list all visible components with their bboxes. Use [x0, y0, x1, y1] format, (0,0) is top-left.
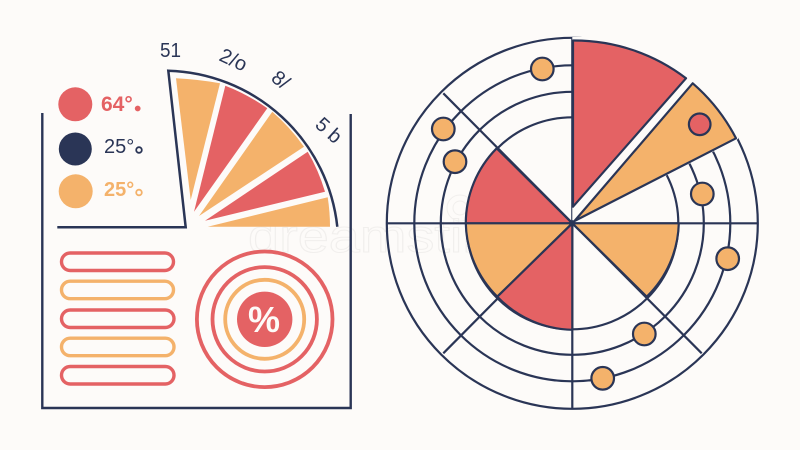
red outer wedge [573, 40, 686, 207]
legend item: navy 25: 25° [104, 136, 134, 158]
fan outline [57, 71, 337, 227]
nodes [432, 58, 739, 390]
fan labels [160, 40, 346, 148]
watermark: dreamstime [248, 210, 540, 262]
chart: fan segments [57, 71, 337, 227]
percent target: % [248, 299, 280, 340]
legend item: red 64: 64° [101, 93, 133, 116]
percent target [197, 251, 332, 387]
fan labels: 2/o [216, 45, 250, 76]
orange outer wedge [574, 83, 736, 221]
fan labels: 51 [160, 40, 181, 62]
center hub [569, 220, 576, 226]
panel: left frame [42, 113, 351, 408]
watermark [248, 195, 540, 262]
fan labels: 5 b [311, 113, 346, 148]
rings and spokes [387, 38, 758, 409]
chart: radial diagram [387, 37, 758, 409]
fan labels: 8/ [267, 67, 294, 94]
inner wedges [466, 148, 679, 330]
blank sector behind highlighted wedges [572, 37, 740, 223]
list pills [62, 253, 174, 384]
fan wedges [176, 78, 330, 227]
legend item: orange 25: 25° [104, 179, 134, 201]
legend [58, 87, 142, 208]
